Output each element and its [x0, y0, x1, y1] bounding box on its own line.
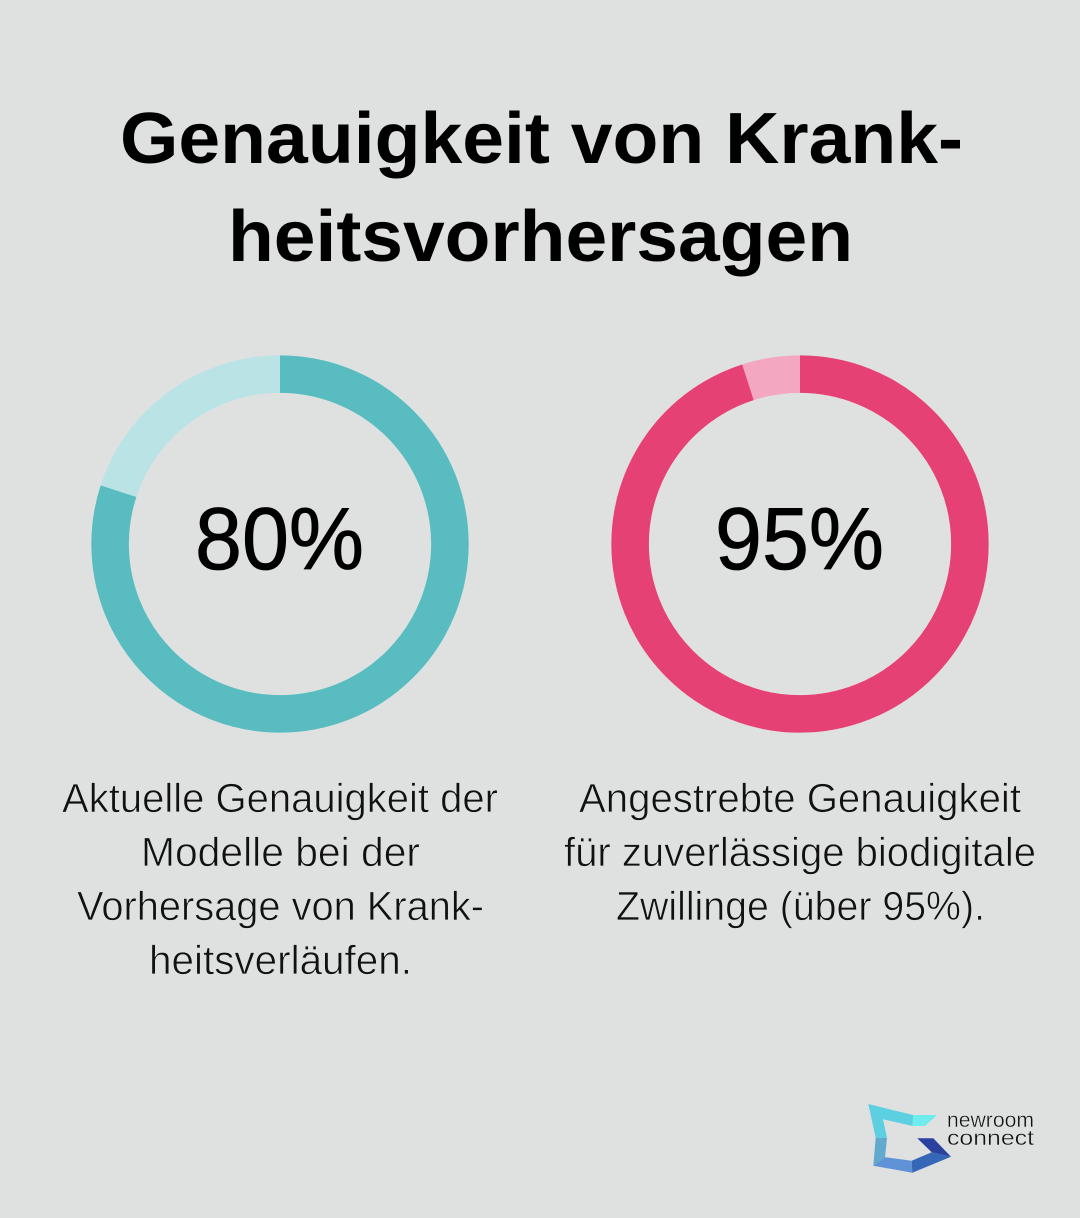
logo wordmark: newroom: [947, 1109, 1034, 1132]
description: current accuracy: [62, 775, 498, 983]
donut chart: 80%: [110, 374, 450, 714]
panel: target accuracy: [564, 374, 1036, 929]
title: heitsvorhersagen: [228, 197, 853, 277]
description: target accuracy: für zuverlässige biodigitale: [564, 829, 1036, 875]
logo wordmark: [947, 1109, 1034, 1150]
description: current accuracy: Aktuelle Genauigkeit der: [62, 775, 498, 821]
logo: newroom connect: [868, 1104, 1034, 1173]
value: 80%: 80%: [195, 489, 364, 588]
icon: logo mark: [868, 1104, 951, 1173]
title: [120, 99, 963, 277]
description: target accuracy: [564, 775, 1036, 929]
description: target accuracy: Zwillinge (über 95%).: [616, 883, 985, 929]
description: current accuracy: heitsverläufen.: [149, 937, 412, 983]
panel: current accuracy: [62, 374, 498, 983]
description: current accuracy: Vorhersage von Krank-: [77, 883, 484, 929]
donut chart: 95%: [630, 374, 970, 714]
title: Genauigkeit von Krank-: [120, 99, 963, 179]
value: 95%: 95%: [715, 489, 884, 588]
logo wordmark: connect: [947, 1127, 1034, 1150]
description: target accuracy: Angestrebte Genauigkeit: [579, 775, 1022, 821]
description: current accuracy: Modelle bei der: [141, 829, 420, 875]
